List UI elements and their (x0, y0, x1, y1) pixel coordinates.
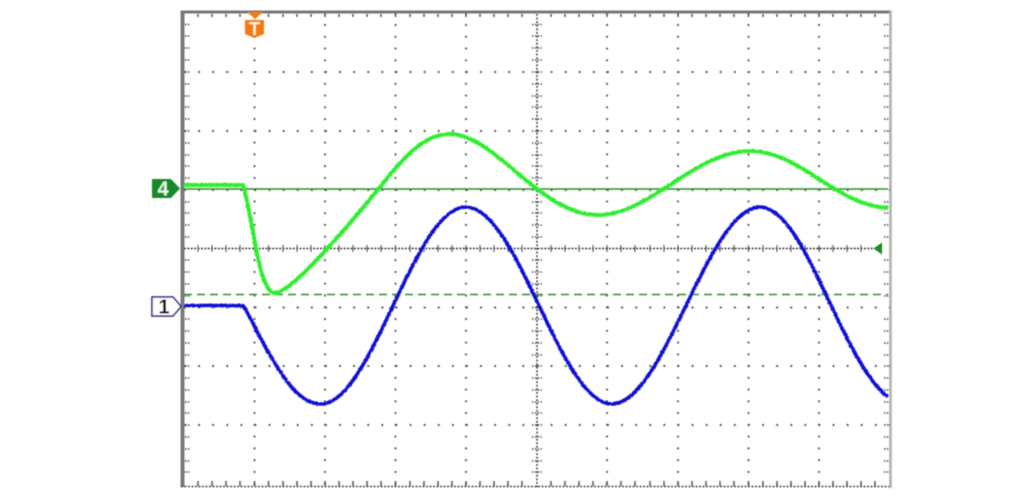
graticule (184, 13, 890, 487)
reference line: dashed trigger level (184, 294, 888, 296)
marker: trigger level arrow (874, 242, 882, 254)
reference line: channel 4 ground (181, 188, 888, 190)
marker: trigger T: T (249, 19, 260, 39)
marker: trigger T (245, 12, 264, 39)
marker: channel 4 (152, 178, 180, 200)
plot frame (181, 11, 891, 488)
trace: channel 1 blue (184, 207, 888, 404)
trace: channel 4 green (184, 134, 888, 293)
center axes (184, 14, 880, 487)
marker: channel 4: 4 (157, 178, 169, 200)
marker: channel 1: 1 (158, 296, 170, 318)
marker: channel 1 (152, 296, 181, 318)
